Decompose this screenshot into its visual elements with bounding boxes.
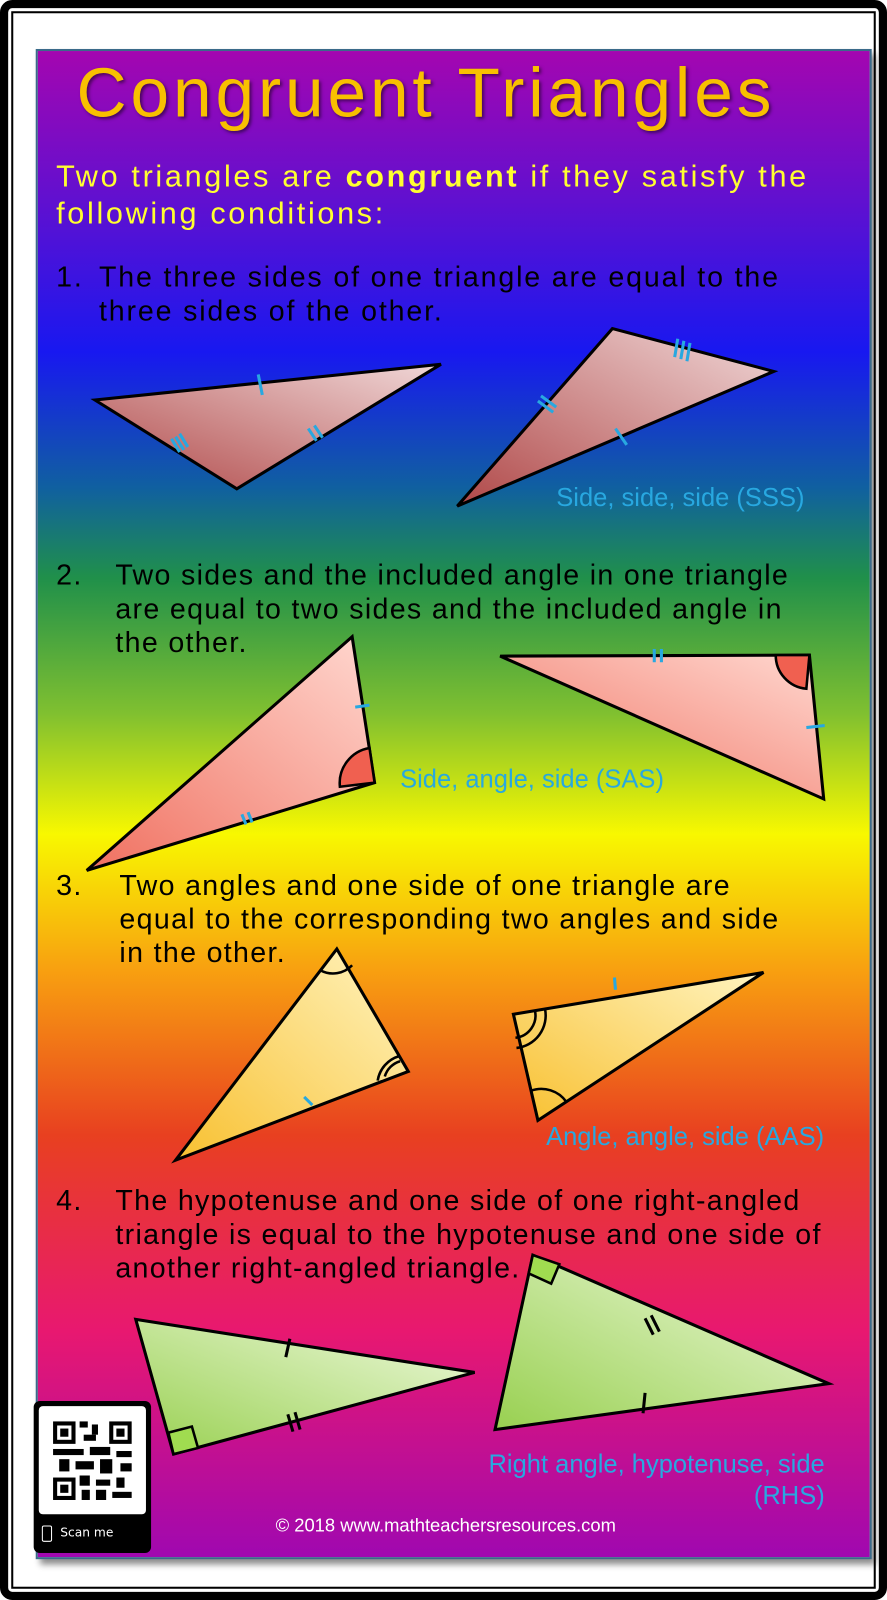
item 4 text — [56, 1185, 822, 1284]
item 3 text: 3. — [56, 869, 83, 901]
triangle: RHS right — [495, 1255, 829, 1430]
item 3 text: Two angles and one side of one triangle are — [119, 869, 731, 901]
triangle: SSS left — [95, 364, 441, 489]
item 3 text: equal to the corresponding two angles and side — [119, 903, 779, 935]
triangle: RHS left — [136, 1319, 475, 1454]
item 4 text: 4. — [56, 1185, 83, 1216]
triangle: SAS left — [87, 637, 375, 870]
intro text: Two triangles are congruent if they satisfy the — [56, 160, 809, 194]
item 3 text — [56, 869, 779, 968]
tick marks — [171, 339, 825, 1105]
text: (RHS) — [754, 1482, 825, 1510]
QR code — [39, 1406, 146, 1514]
item 4 text: The hypotenuse and one side of one right-angled — [115, 1185, 801, 1216]
footer copyright: © 2018 www.mathteachersresources.com — [276, 1515, 616, 1536]
item 1 text — [56, 261, 780, 327]
item 1 text: 1. — [56, 261, 84, 293]
triangle: AAS right — [513, 972, 763, 1120]
triangle: SAS right — [500, 655, 824, 799]
item 2 text: Two sides and the included angle in one triangle — [115, 559, 789, 591]
item 2 text: 2. — [56, 559, 83, 591]
intro text: following conditions: — [56, 197, 386, 231]
text: Right angle, hypotenuse, side — [489, 1450, 825, 1479]
QR code box — [34, 1401, 151, 1553]
triangle: AAS left — [176, 949, 408, 1160]
text: Side, angle, side (SAS) — [400, 765, 664, 794]
title: Congruent Triangles — [77, 54, 775, 132]
item 3 text: in the other. — [119, 937, 286, 968]
item 2 text — [56, 559, 789, 658]
scan me: Scan me — [60, 1525, 113, 1540]
angle marks — [168, 655, 809, 1454]
item 4 text: triangle is equal to the hypotenuse and one side of — [115, 1218, 822, 1250]
item 1 text: three sides of the other. — [99, 295, 444, 327]
item 4 text: another right-angled triangle. — [115, 1252, 521, 1284]
labels: Side, side, side (SSS) — [556, 484, 804, 512]
intro text — [56, 160, 809, 231]
triangle: SSS right — [457, 329, 774, 506]
item 2 text: are equal to two sides and the included angle in — [115, 593, 783, 624]
item 1 text: The three sides of one triangle are equal to the — [99, 261, 780, 293]
item 2 text: the other. — [115, 627, 248, 658]
text: Angle, angle, side (AAS) — [546, 1122, 824, 1151]
scan me — [42, 1525, 113, 1542]
